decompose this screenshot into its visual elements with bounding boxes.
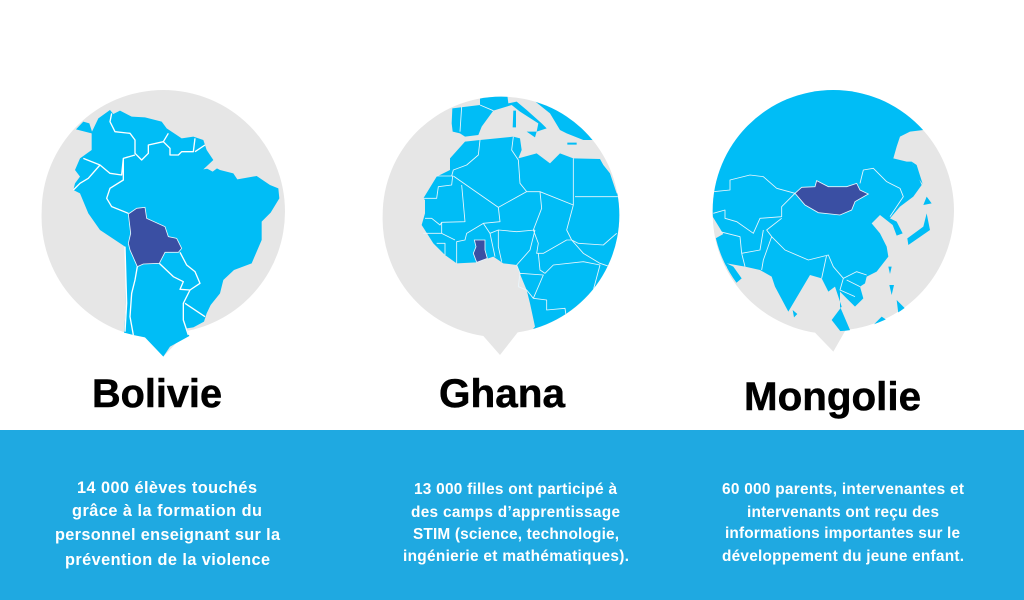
text block: Bolivie: grâce à la formation du [72,502,262,520]
map: Bolivie [42,90,285,357]
land masses [422,96,620,329]
Mongolia highlighted [795,181,868,215]
Asia [712,90,923,332]
islands [793,162,932,330]
country borders [713,168,903,297]
globe pin [713,90,954,352]
text block: Mongolie: intervenants ont reçu des [747,504,939,521]
text block: Ghana: 13 000 filles ont participé à [414,481,617,498]
text block: Bolivie: personnel enseignant sur la [55,526,281,544]
text block: Ghana [403,481,629,565]
text block: Bolivie [55,479,281,569]
Bolivia highlighted [128,207,182,267]
Europe [452,96,592,140]
islands [513,111,577,145]
country borders [423,105,618,320]
land masses [712,90,932,332]
Africa [422,136,620,329]
map: Mongolie [700,90,967,352]
Amazon estuary [207,164,218,172]
heading: Mongolie: Mongolie [744,375,921,419]
text block: Ghana: ingénierie et mathématiques). [403,548,629,565]
map: Ghana [383,90,637,357]
globe pin [42,90,285,357]
Ghana highlighted [473,240,487,262]
globe pin [383,97,619,355]
text block: Mongolie [722,481,964,565]
South America [73,110,279,357]
text block: Bolivie: 14 000 élèves touchés [77,479,257,497]
text block: Mongolie: 60 000 parents, intervenantes et [722,481,964,498]
text block: Ghana: STIM (science, technologie, [413,526,619,543]
heading: Ghana: Ghana [439,372,566,416]
country borders [73,113,205,335]
text block: Ghana: des camps d’apprentissage [411,504,620,521]
text block: Mongolie: informations importantes sur le [725,525,960,542]
text block: Bolivie: prévention de la violence [65,551,270,569]
text block: Mongolie: développement du jeune enfant. [722,548,964,565]
panel: bottom band [0,430,1024,600]
heading: Bolivie: Bolivie [92,372,222,416]
